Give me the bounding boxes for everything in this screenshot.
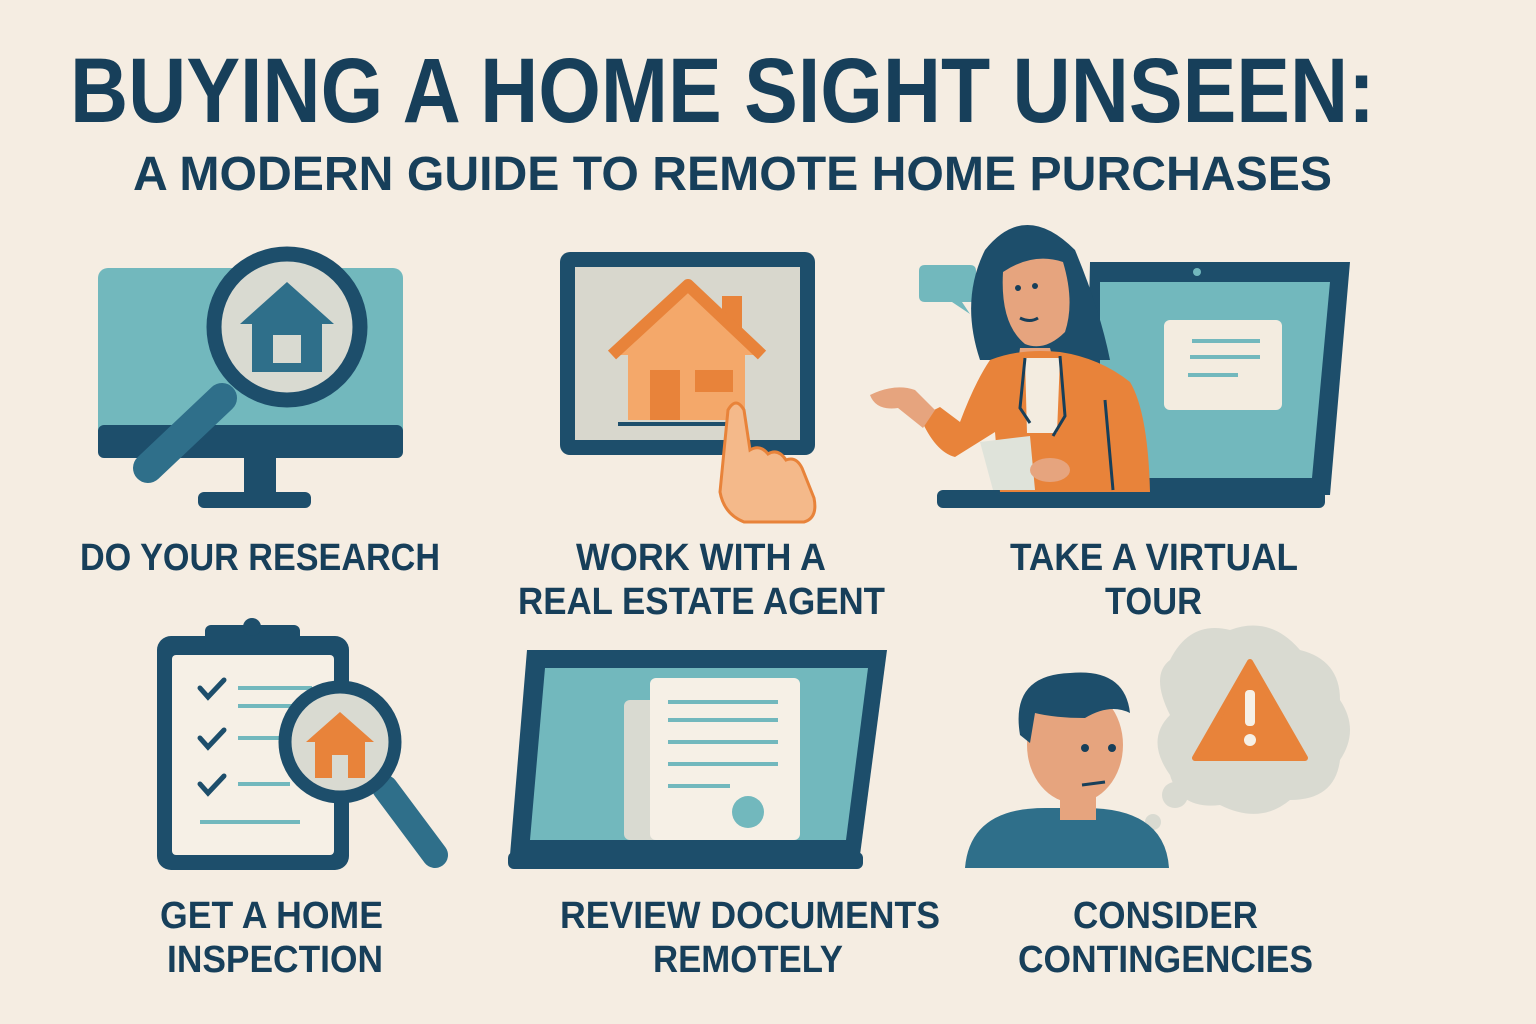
- label: home inspection: [160, 895, 383, 981]
- label: work with agent: [518, 537, 885, 623]
- icon: tablet with house and hand: [560, 252, 815, 522]
- subtitle: A MODERN GUIDE TO REMOTE HOME PURCHASES: [133, 148, 1332, 201]
- label: virtual tour: TOUR: [1105, 581, 1202, 623]
- label: home inspection: GET A HOME: [160, 895, 383, 937]
- label: home inspection: INSPECTION: [167, 939, 383, 981]
- label: work with agent: REAL ESTATE AGENT: [518, 581, 885, 623]
- label: virtual tour: [1010, 537, 1298, 623]
- label: contingencies: CONSIDER: [1073, 895, 1258, 937]
- icon: worried person with warning thought bubble: [965, 626, 1350, 868]
- label: contingencies: CONTINGENCIES: [1018, 939, 1313, 981]
- label: work with agent: WORK WITH A: [576, 537, 826, 579]
- label: virtual tour: TAKE A VIRTUAL: [1010, 537, 1298, 579]
- title: [70, 40, 1375, 201]
- label: review documents: REVIEW DOCUMENTS: [560, 895, 940, 937]
- icon: virtual tour laptop with presenter: [870, 225, 1350, 508]
- icon: laptop with document: [508, 650, 887, 869]
- title: BUYING A HOME SIGHT UNSEEN:: [70, 40, 1375, 142]
- label: contingencies: [1018, 895, 1313, 981]
- label: review documents: REMOTELY: [653, 939, 843, 981]
- label: review documents: [560, 895, 940, 981]
- label: do your research: DO YOUR RESEARCH: [80, 537, 440, 579]
- icon: monitor with magnifier: [98, 254, 403, 508]
- icon: clipboard with magnifier: [157, 618, 435, 870]
